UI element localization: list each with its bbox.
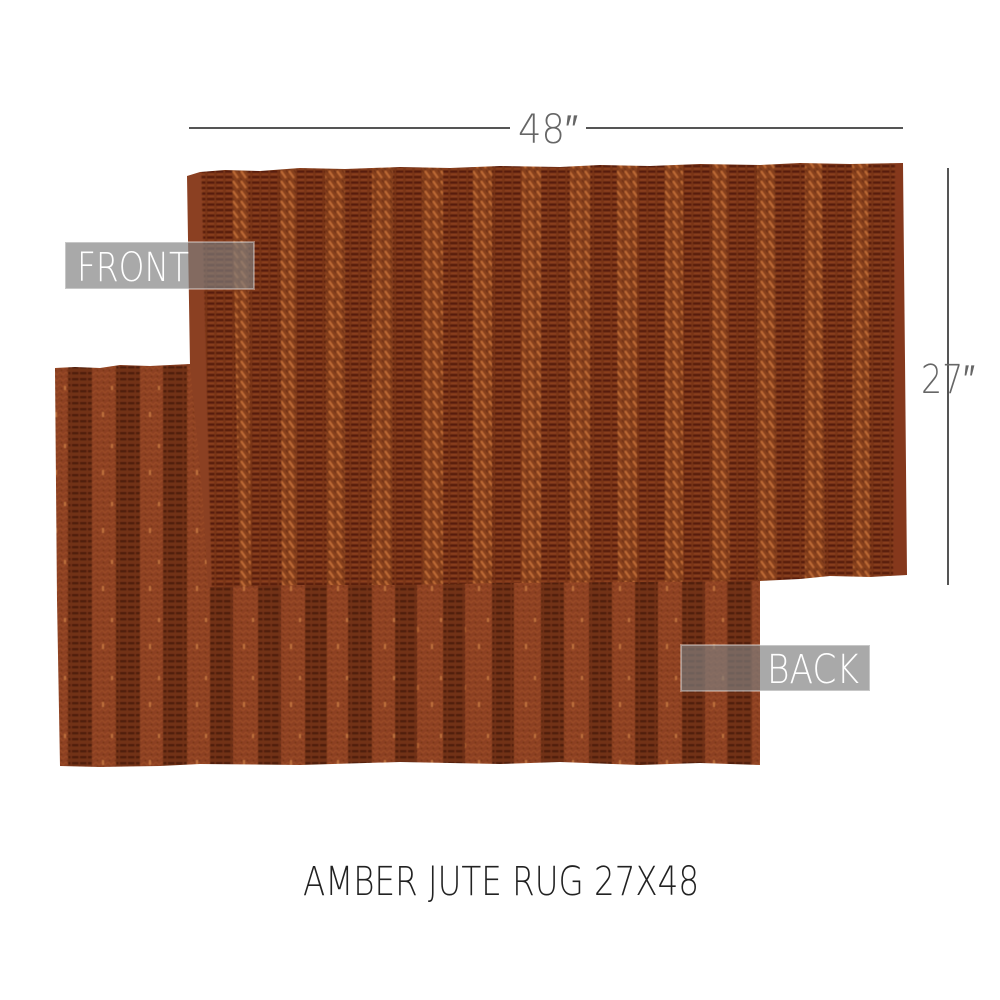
rug back side xyxy=(45,355,775,775)
title: AMBER JUTE RUG 27X48 xyxy=(303,859,699,905)
dimension: width 48 inches: 48″ xyxy=(518,107,578,153)
label: BACK: BACK xyxy=(767,647,859,693)
label: FRONT xyxy=(65,242,254,291)
dimension: height 27 inches: 27″ xyxy=(921,357,975,403)
label: BACK xyxy=(681,645,870,693)
rug front side xyxy=(175,155,915,595)
label: FRONT: FRONT xyxy=(77,245,189,291)
